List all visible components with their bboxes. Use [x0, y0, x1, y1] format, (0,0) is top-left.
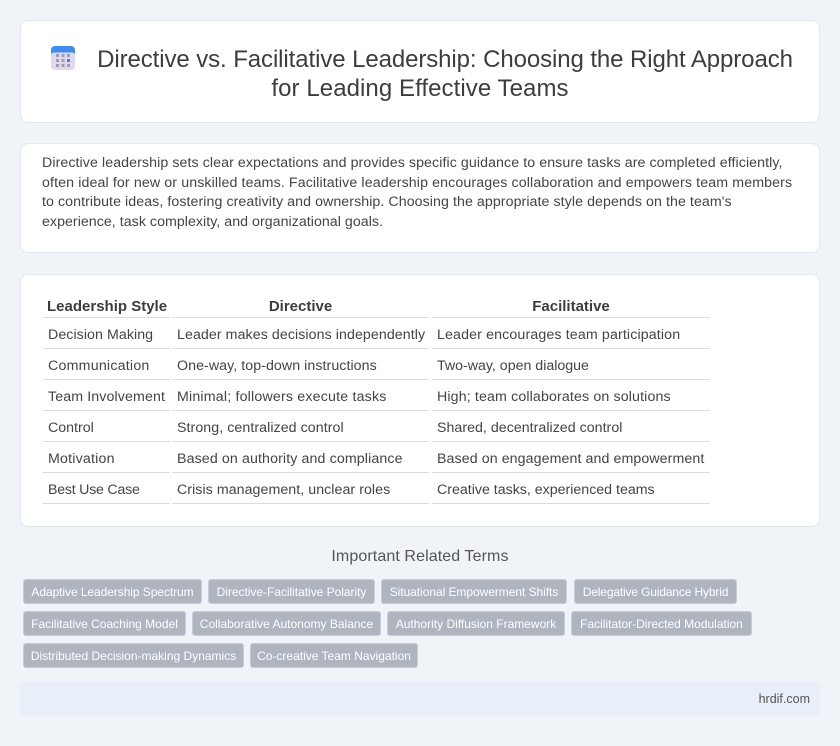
row: decision making: Leader makes decisions independently [177, 327, 425, 343]
tags: related terms: Facilitative Coaching Model [31, 617, 178, 631]
row: best use case: Creative tasks, experienced teams [437, 482, 655, 498]
row: decision making: Decision Making [48, 327, 153, 343]
title: for Leading Effective Teams [271, 75, 569, 102]
panel: comparison table [20, 274, 820, 527]
comparison table [43, 317, 710, 504]
tags: related terms: Directive-Facilitative Polarity [217, 585, 366, 599]
tags: related terms: Delegative Guidance Hybrid [583, 585, 728, 599]
row: motivation [48, 451, 704, 467]
row: control: Control [48, 420, 94, 436]
tags: related terms [23, 579, 752, 668]
title [97, 46, 793, 102]
header row: Facilitative [532, 298, 610, 315]
row: team involvement: Minimal; followers execute tasks [177, 389, 387, 405]
row: best use case: Best Use Case [48, 482, 140, 498]
row: best use case [48, 482, 655, 498]
heading: related terms: Important Related Terms [331, 548, 509, 565]
tags: related terms: Situational Empowerment Shifts [390, 585, 558, 599]
row: motivation: Motivation [48, 451, 115, 467]
row: communication: Two-way, open dialogue [437, 358, 589, 374]
tags: related terms: Facilitator-Directed Modulation [580, 617, 743, 631]
footer band [20, 682, 820, 716]
intro text: often ideal for new or unskilled teams. Facilitative leadership encourages collaboration and empowers team members [42, 175, 792, 191]
row: control: Strong, centralized control [177, 420, 344, 436]
tags: related terms: Co-creative Team Navigation [257, 649, 411, 663]
tags: related terms: Distributed Decision-making Dynamics [31, 649, 236, 663]
row: motivation: Based on authority and compliance [177, 451, 403, 467]
row: control: Shared, decentralized control [437, 420, 622, 436]
tags: related terms: Adaptive Leadership Spectrum [31, 585, 194, 599]
row: motivation: Based on engagement and empowerment [437, 451, 704, 467]
row: team involvement: High; team collaborates on solutions [437, 389, 671, 405]
footer source: hrdif.com [759, 692, 810, 706]
header row [47, 298, 610, 315]
tags: related terms: Collaborative Autonomy Balance [200, 617, 373, 631]
row: control [48, 420, 622, 436]
row: decision making [48, 327, 680, 343]
row: communication: One-way, top-down instructions [177, 358, 377, 374]
header row: Directive [269, 298, 332, 315]
panel: introduction [20, 143, 820, 253]
row: communication [48, 358, 589, 374]
row: best use case: Crisis management, unclear roles [177, 482, 390, 498]
intro text: to contribute ideas, fostering creativity and ownership. Choosing the appropriate style depends on the team's [42, 194, 732, 210]
title: Directive vs. Facilitative Leadership: Choosing the Right Approach [97, 46, 793, 73]
intro text: experience, task complexity, and organizational goals. [42, 214, 383, 230]
intro text [42, 155, 792, 230]
header row: Leadership Style [47, 298, 167, 315]
panel: header [20, 20, 820, 123]
row: team involvement: Team Involvement [48, 389, 165, 405]
row: team involvement [48, 389, 671, 405]
row: decision making: Leader encourages team participation [437, 327, 680, 343]
row: communication: Communication [48, 358, 150, 374]
icon: calendar [51, 46, 75, 70]
tags: related terms: Authority Diffusion Framework [396, 617, 556, 631]
intro text: Directive leadership sets clear expectations and provides specific guidance to ensure tasks are completed efficiently, [42, 155, 783, 171]
